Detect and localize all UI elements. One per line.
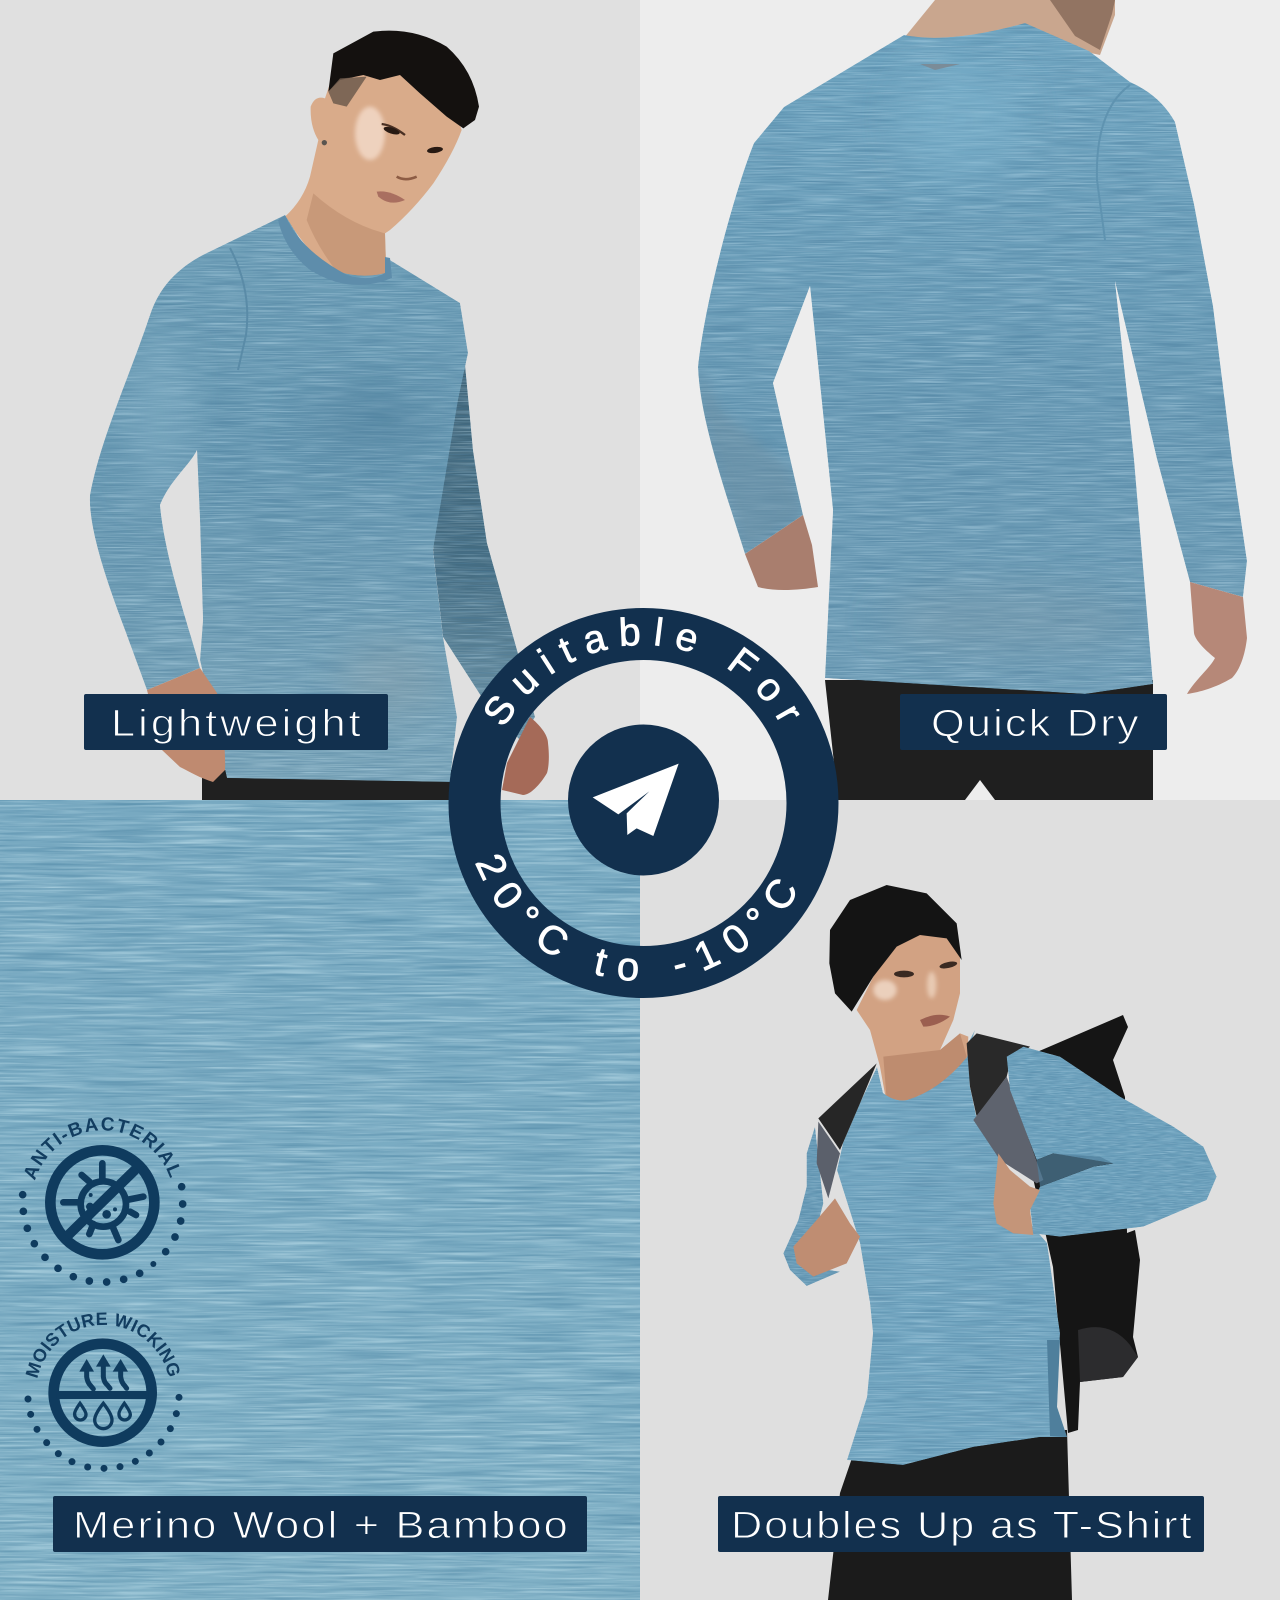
trousers: [828, 1430, 1072, 1600]
person: back view wearing blue shirt: [698, 0, 1247, 800]
panel: lightweight photo: [84, 30, 549, 800]
badge: moisture wicking: [24, 1312, 182, 1472]
backpack: [1020, 1015, 1140, 1433]
panel background: bottom right: [640, 800, 1280, 1600]
ring text: 20°C to -10°C: 20°C to -10°C: [475, 854, 796, 981]
head: [285, 31, 479, 287]
dotted ring: [19, 1183, 186, 1286]
straps: [818, 1063, 877, 1150]
icon: crossed out bacteria: [50, 1150, 154, 1254]
person: wearing shirt with backpack: [783, 885, 1217, 1600]
person: front view wearing blue shirt: [90, 31, 549, 800]
dotted ring: [24, 1394, 182, 1472]
badge: anti-bacterial: [18, 1117, 186, 1286]
panel: doubles up as t-shirt photo: [640, 800, 1280, 1600]
fabric swatch: [0, 800, 640, 1600]
near arm: [1007, 1047, 1217, 1237]
label: Quick Dry: Quick Dry: [931, 701, 1139, 744]
panel background: top right: [640, 0, 1280, 800]
beanie: [829, 885, 962, 1012]
centre disc: [568, 724, 719, 876]
ring text: Suitable For: Suitable For: [484, 616, 800, 724]
label: Doubles Up as T-Shirt: Doubles Up as T-Shirt: [731, 1503, 1192, 1546]
icon: arrows and water drops: [54, 1344, 152, 1442]
label: Lightweight: [84, 694, 388, 750]
neck and face: [857, 927, 968, 1113]
label: Lightweight: Lightweight: [111, 701, 361, 744]
ring: [474, 634, 812, 972]
shirt: [837, 1030, 1067, 1465]
label: Quick Dry: [900, 694, 1167, 750]
label: Merino Wool + Bamboo: Merino Wool + Bamboo: [73, 1503, 568, 1546]
hands: [793, 1198, 860, 1277]
icon: paper plane: [593, 764, 679, 836]
panel: fabric close-up: [0, 800, 640, 1600]
badge: moisture wicking: MOISTURE WICKING: [26, 1312, 180, 1378]
badge: anti-bacterial: ANTI-BACTERIAL: [24, 1117, 180, 1180]
panel: quick dry photo: [640, 0, 1280, 800]
panel background: top left: [0, 0, 640, 800]
temperature badge: [448, 608, 838, 998]
far arm: [783, 1127, 840, 1286]
